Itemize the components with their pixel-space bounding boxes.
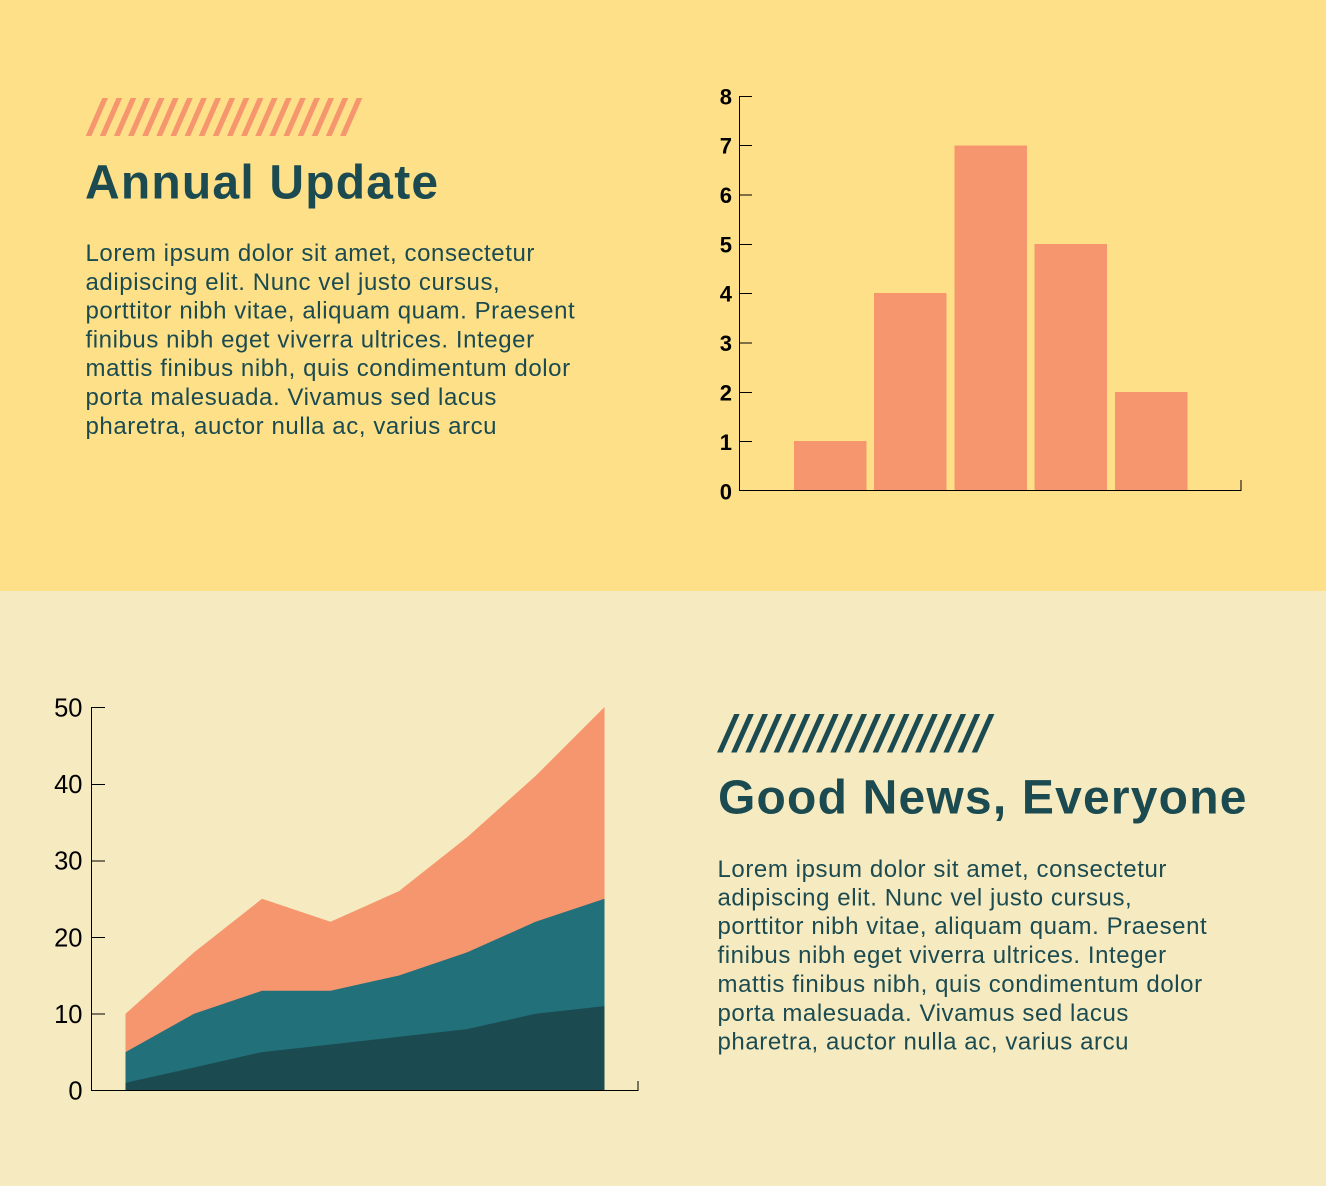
area: dark series bbox=[126, 1006, 604, 1090]
bar chart y-axis labels: 7 bbox=[720, 134, 732, 159]
bar chart axes bbox=[740, 96, 1241, 490]
area chart y-axis labels: 0 bbox=[68, 1078, 82, 1106]
text block: annual update body: mattis finibus nibh, quis condimentum dolor bbox=[86, 355, 571, 382]
text block: annual update body: pharetra, auctor nulla ac, varius arcu bbox=[86, 413, 497, 440]
bar chart y-axis labels: 6 bbox=[720, 183, 732, 208]
area chart y-axis labels: 10 bbox=[54, 1001, 82, 1029]
area chart bbox=[54, 694, 638, 1106]
area chart y-axis labels: 30 bbox=[54, 848, 82, 876]
text block: annual update body: porttitor nibh vitae, aliquam quam. Praesent bbox=[86, 298, 575, 324]
area chart y-axis labels: 20 bbox=[54, 924, 82, 952]
area: orange series bbox=[126, 707, 604, 1090]
text block: annual update body: finibus nibh eget viverra ultrices. Integer bbox=[86, 326, 535, 354]
bar chart y-axis labels: 2 bbox=[720, 380, 732, 406]
bar chart y-axis labels: 1 bbox=[720, 430, 732, 455]
area chart y-axis labels: 50 bbox=[54, 694, 82, 722]
bar chart y-axis labels bbox=[720, 84, 733, 504]
text block: good news body: adipiscing elit. Nunc vel justo cursus, bbox=[718, 884, 1132, 912]
area chart y-axis labels: 40 bbox=[54, 771, 82, 799]
bar chart y-axis labels: 0 bbox=[720, 480, 732, 504]
icon: teal diagonal stripes bbox=[717, 714, 994, 752]
bar chart y-axis labels: 8 bbox=[720, 84, 732, 110]
bar chart bbox=[720, 84, 1241, 504]
text block: good news body: porttitor nibh vitae, aliquam quam. Praesent bbox=[718, 913, 1207, 940]
text block: good news body: pharetra, auctor nulla ac, varius arcu bbox=[718, 1028, 1129, 1056]
bar chart y-axis labels: 3 bbox=[720, 331, 732, 356]
text block: good news body: mattis finibus nibh, quis condimentum dolor bbox=[718, 971, 1203, 998]
area chart axes bbox=[92, 708, 638, 1090]
text block: good news body: finibus nibh eget viverra ultrices. Integer bbox=[718, 942, 1167, 969]
bars bbox=[794, 146, 1188, 490]
text block: annual update body: porta malesuada. Vivamus sed lacus bbox=[86, 384, 497, 411]
text block: annual update body: adipiscing elit. Nunc vel justo cursus, bbox=[86, 269, 500, 296]
text block: good news body: porta malesuada. Vivamus sed lacus bbox=[718, 1000, 1129, 1027]
text block: good news body: Lorem ipsum dolor sit amet, consectetur bbox=[718, 856, 1167, 883]
heading: Annual Update: Annual Update bbox=[85, 156, 439, 210]
panel: annual update background bbox=[0, 0, 1326, 591]
area chart y-axis labels bbox=[54, 694, 82, 1106]
panel: good news background bbox=[0, 591, 1326, 1186]
heading: Good News, Everyone: Good News, Everyone bbox=[718, 772, 1248, 824]
bar chart y-axis labels: 5 bbox=[720, 232, 732, 258]
area: teal series bbox=[126, 899, 604, 1090]
bar chart y-axis labels: 4 bbox=[720, 282, 733, 307]
text block: annual update body: Lorem ipsum dolor sit amet, consectetur bbox=[86, 240, 535, 267]
icon: orange diagonal stripes bbox=[86, 98, 362, 136]
